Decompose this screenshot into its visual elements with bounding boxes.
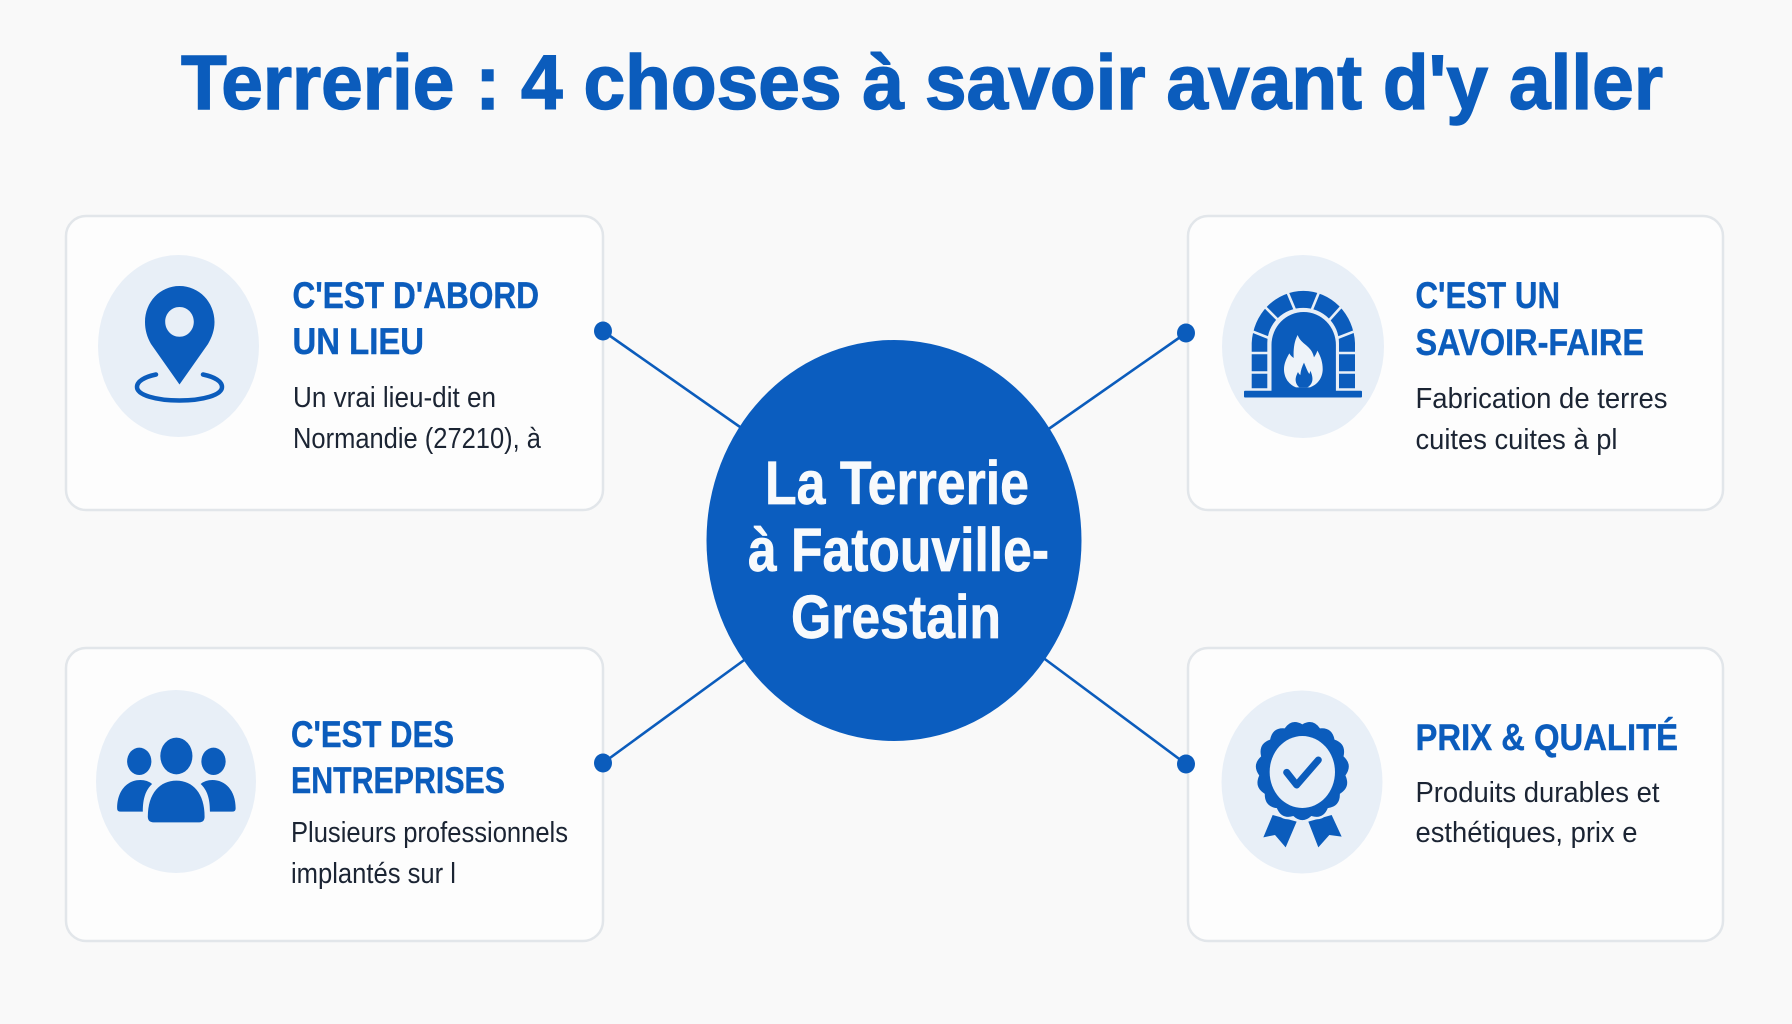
icon: brick oven bbox=[1222, 255, 1384, 438]
heading: C'EST DES bbox=[291, 714, 454, 755]
title: Terrerie : 4 choses à savoir avant d'y aller bbox=[181, 40, 1663, 126]
text block: Produits durables et bbox=[1416, 777, 1660, 809]
heading: PRIX & QUALITÉ bbox=[1416, 717, 1678, 758]
text block: Fabrication de terres bbox=[1416, 383, 1668, 415]
central circle bbox=[706, 340, 1082, 741]
text block: Plusieurs professionnels bbox=[291, 817, 568, 849]
heading: C'EST D'ABORD bbox=[292, 275, 539, 316]
panel: c'est un savoir-faire bbox=[1188, 216, 1723, 510]
central text: à Fatouville- bbox=[748, 516, 1049, 584]
central text: Grestain bbox=[791, 583, 1001, 651]
icon: rosette badge with check bbox=[1222, 690, 1382, 874]
text block bbox=[293, 382, 542, 455]
central text bbox=[748, 449, 1049, 651]
connector lines bbox=[603, 331, 1186, 764]
text block bbox=[1416, 777, 1660, 849]
panel: c'est d'abord un lieu bbox=[66, 216, 603, 510]
text block bbox=[1416, 383, 1668, 456]
connector dots bbox=[594, 322, 1195, 774]
panel: c'est des entreprises bbox=[66, 648, 603, 941]
panel: c'est un savoir-faire: SAVOIR-FAIRE bbox=[1416, 322, 1644, 363]
panel: c'est d'abord un lieu: UN LIEU bbox=[292, 321, 424, 362]
panel: prix et qualité bbox=[1188, 648, 1723, 941]
heading: C'EST UN bbox=[1416, 275, 1560, 316]
text block: cuites cuites à pl bbox=[1416, 424, 1618, 456]
icon: location pin bbox=[98, 255, 259, 437]
central text: La Terrerie bbox=[765, 449, 1029, 517]
icon: group of people bbox=[96, 690, 256, 873]
text block bbox=[291, 817, 568, 890]
text block: esthétiques, prix e bbox=[1416, 817, 1638, 849]
text block: Normandie (27210), à bbox=[293, 423, 542, 455]
text block: implantés sur l bbox=[291, 858, 456, 890]
panel: c'est des entreprises: ENTREPRISES bbox=[291, 760, 505, 801]
text block: Un vrai lieu-dit en bbox=[293, 382, 496, 414]
